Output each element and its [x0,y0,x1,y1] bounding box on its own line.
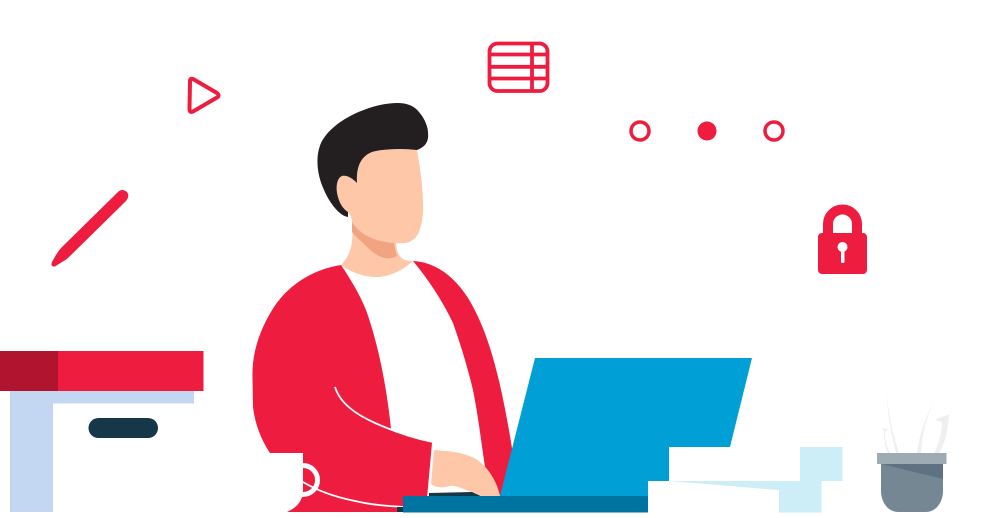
stack of books [648,447,842,512]
desk top shaded end [0,351,58,391]
drawer handle [88,418,158,438]
plant leaves [882,393,949,453]
potted plant [877,393,949,512]
bottom book [648,481,779,512]
neck shadow [352,222,397,258]
sleeve lower line [303,482,404,507]
laptop base [403,496,648,512]
icon: pencil [51,190,128,267]
icon: three progress dots [631,122,783,140]
hand [431,450,500,496]
desk top [0,351,204,391]
pot shadow [881,464,943,479]
pot rim [877,453,946,464]
keyboard [397,492,483,512]
desk leg and support [10,391,194,512]
desk with drawer [0,351,204,512]
laptop screen [500,358,752,496]
pot body [881,464,943,512]
hair [317,103,428,217]
person [252,103,514,512]
icon: play triangle [190,79,218,112]
top book [669,447,800,481]
jacket right panel [413,261,514,497]
icon: table grid [489,43,548,91]
icon: padlock [818,210,867,274]
laptop [397,358,752,512]
jacket [252,265,433,512]
coffee mug [262,453,318,512]
neck and face [337,149,423,277]
arm crease line [335,387,433,497]
